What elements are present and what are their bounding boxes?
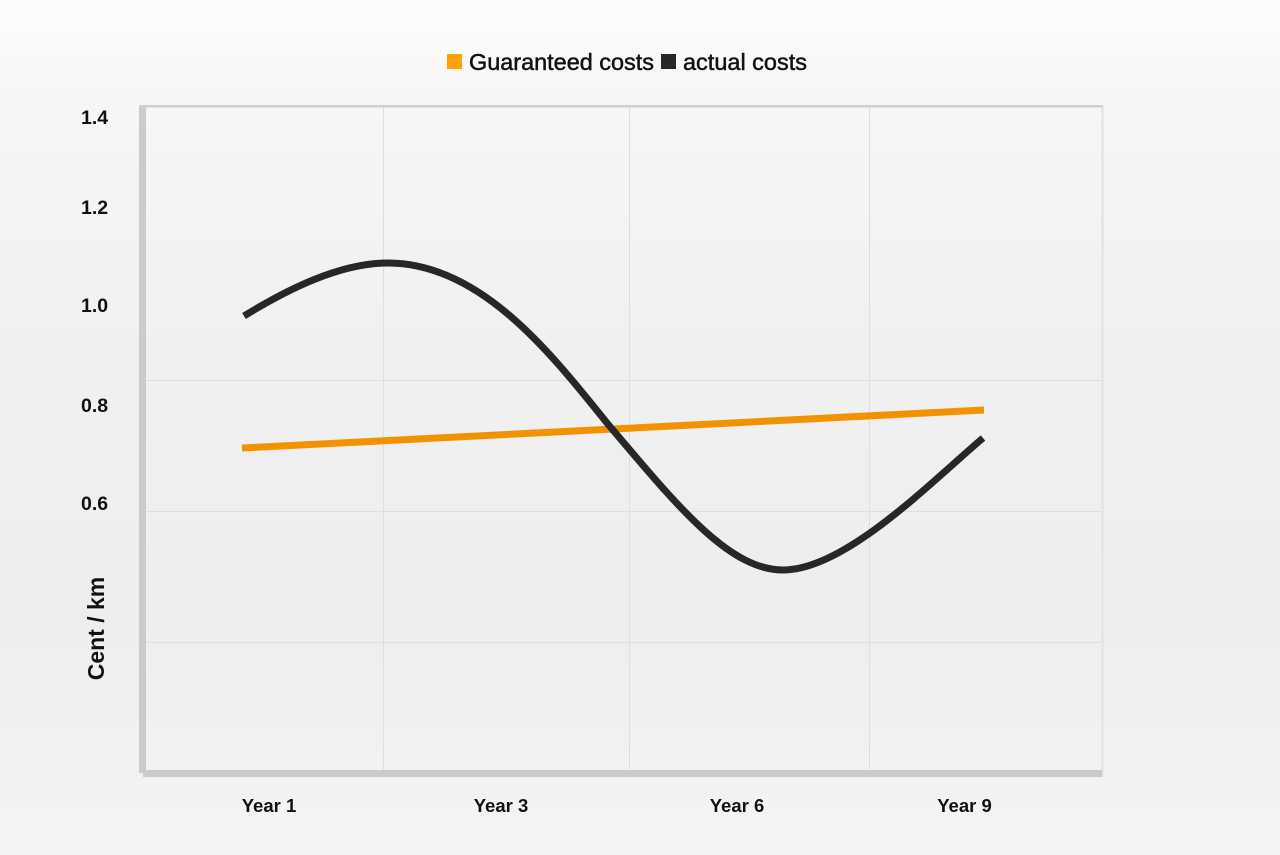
- x axis labels: Year 9: [937, 795, 992, 816]
- y axis labels: [81, 107, 108, 515]
- y axis labels: 1.0: [81, 295, 108, 317]
- legend label: guaranteed costs: Guaranteed costs: [469, 49, 654, 75]
- x axis labels: Year 1: [242, 795, 296, 816]
- y axis labels: 0.8: [81, 395, 108, 417]
- legend swatch: actual costs: [661, 54, 676, 69]
- y axis title: Cent / km: [83, 577, 109, 680]
- x axis labels: Year 3: [474, 795, 528, 816]
- line: guaranteed costs: [242, 410, 984, 448]
- legend: [447, 49, 807, 75]
- legend swatch: guaranteed costs: [447, 54, 462, 69]
- chart axes: [139, 105, 1103, 777]
- line: actual costs: [244, 263, 983, 570]
- legend label: actual costs: actual costs: [683, 49, 807, 75]
- x axis labels: Year 6: [710, 795, 764, 816]
- chart grid lines: [146, 107, 1102, 777]
- y axis labels: 1.2: [81, 197, 108, 219]
- y axis labels: 0.6: [81, 493, 108, 515]
- y axis labels: 1.4: [81, 107, 108, 129]
- x axis labels: [242, 795, 992, 816]
